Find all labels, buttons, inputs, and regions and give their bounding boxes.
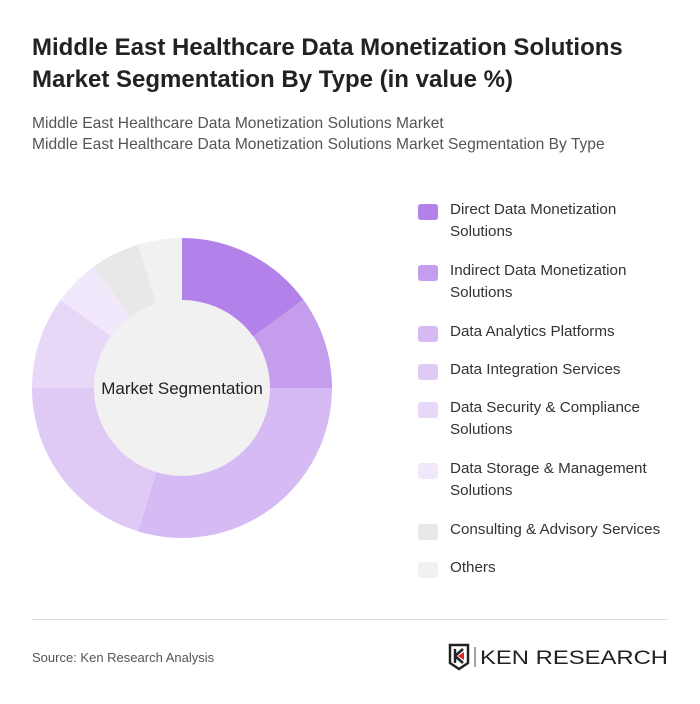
legend item 4 — [418, 361, 621, 380]
subtitle: Middle East Healthcare Data Monetization Solutions Market Segmentation By Type — [32, 136, 605, 153]
logo — [448, 644, 668, 670]
legend item 8 — [418, 559, 496, 578]
source: Source: Ken Research Analysis — [32, 650, 214, 665]
logo: KEN RESEARCH — [480, 648, 668, 669]
legend item 7 — [418, 521, 660, 540]
legend: Others — [450, 559, 496, 576]
legend: Data Storage & Management Solutions — [450, 460, 647, 499]
title: Middle East Healthcare Data Monetization Solutions Market Segmentation By Type (in value %) — [32, 34, 623, 93]
legend: Indirect Data Monetization Solutions — [450, 262, 626, 301]
legend item 5 — [418, 399, 640, 438]
legend: Data Analytics Platforms — [450, 323, 615, 340]
legend item 3 — [418, 323, 615, 342]
legend: Data Integration Services — [450, 361, 621, 378]
donut chart — [32, 238, 332, 538]
subtitle — [32, 115, 605, 153]
donut chart: Market Segmentation — [101, 379, 263, 398]
legend: Consulting & Advisory Services — [450, 521, 660, 538]
legend item 2 — [418, 262, 626, 301]
legend item 1 — [418, 201, 616, 240]
legend item 6 — [418, 460, 647, 499]
subtitle: Middle East Healthcare Data Monetization Solutions Market — [32, 115, 444, 132]
legend: Direct Data Monetization Solutions — [450, 201, 616, 240]
legend: Data Security & Compliance Solutions — [450, 399, 640, 438]
legend — [418, 201, 660, 578]
